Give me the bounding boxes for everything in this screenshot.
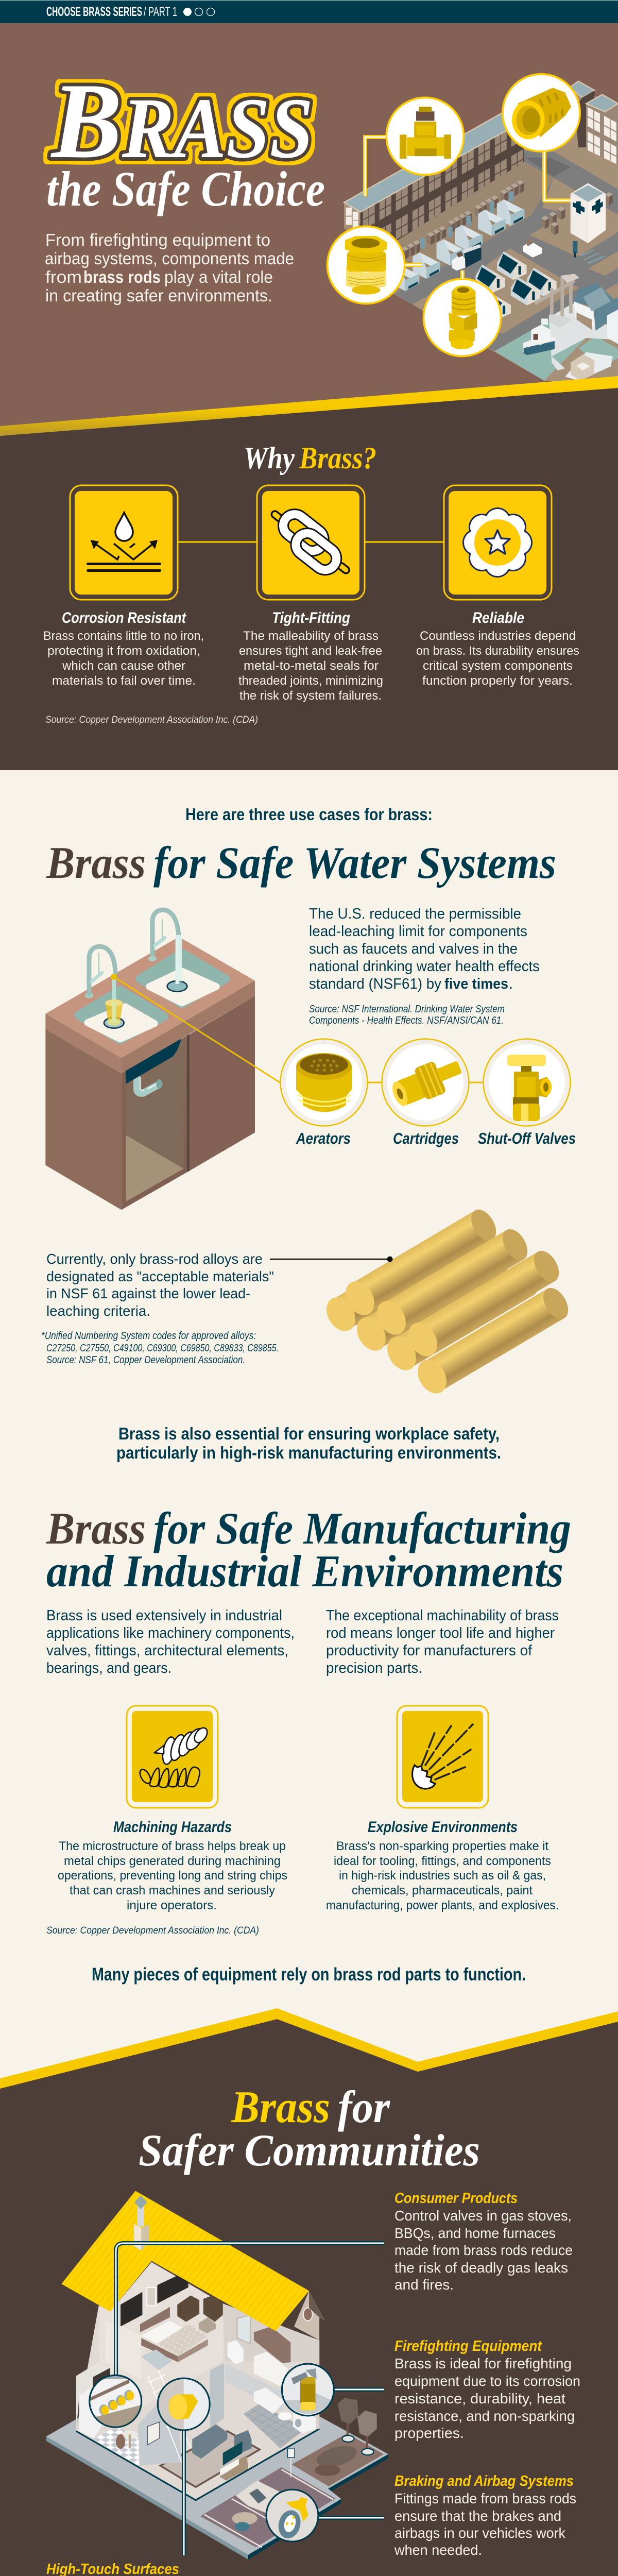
text: reliable: function properly for years.	[422, 674, 573, 688]
text: braking and airbag: Braking and Airbag Systems	[394, 2473, 574, 2489]
text: corrosion resistant: materials to fail over time.	[52, 674, 196, 688]
text: consumer products: BBQs, and home furnaces	[394, 2225, 556, 2241]
heading: manufacturing	[46, 1504, 571, 1597]
callout circle: gas stove knobs	[90, 2375, 142, 2430]
callout circle: cable gland	[328, 226, 405, 303]
hospital block	[541, 216, 549, 229]
paragraph: lead leaching: standard (NSF61) by	[309, 976, 441, 992]
text: consumer products: made from brass rods reduce	[394, 2242, 573, 2258]
component labels: Aerators	[296, 1129, 351, 1147]
text: explosive environments: Explosive Environments	[368, 1819, 518, 1836]
icon: water drop deflecting	[87, 513, 161, 572]
diagonal yellow band	[0, 376, 618, 436]
heading: safer communities: Brass	[231, 2082, 330, 2132]
paragraph: machinability: rod means longer tool life and higher	[326, 1625, 555, 1641]
parking sign	[290, 2458, 291, 2477]
subtitle: the Safe Choice	[46, 161, 325, 216]
paragraph: industrial applications	[46, 1607, 295, 1676]
source: NSF: Source: NSF International. Drinking Water System	[309, 1004, 505, 1015]
hero illustration: isometric industrial city	[344, 81, 618, 386]
text: tight-fitting: metal-to-metal seals for	[244, 659, 379, 673]
heading: why brass	[244, 441, 376, 475]
text: braking and airbag: Fittings made from brass rods	[394, 2490, 576, 2506]
bedroom	[140, 2307, 170, 2332]
paragraph: machinability: The exceptional machinability of brass	[326, 1607, 559, 1624]
cottages	[497, 251, 527, 280]
crane and warehouse	[535, 277, 575, 319]
faucets	[89, 910, 179, 994]
text: reliable: Reliable	[472, 609, 524, 626]
text: consumer products: and fires.	[394, 2277, 454, 2293]
title: Brass	[50, 61, 313, 181]
top series bar: / PART 1	[144, 5, 177, 19]
why brass panel	[0, 376, 618, 770]
text: machining hazards: Machining Hazards	[113, 1819, 232, 1836]
source: NSF	[309, 1004, 505, 1026]
long factory	[344, 203, 360, 230]
text: machining hazards	[58, 1819, 287, 1912]
paragraph: acceptable materials: Currently, only brass-rod alloys are	[46, 1251, 263, 1267]
callout circle: gate valve	[386, 97, 464, 175]
heading: manufacturing: and Industrial Environments	[46, 1547, 563, 1597]
transition statement: workplace safety: particularly in high-risk manufacturing environments.	[116, 1443, 501, 1462]
text: corrosion resistant: protecting it from oxidation,	[47, 644, 200, 658]
intro paragraph: From firefighting equipment to	[45, 230, 270, 249]
text: explosive environments: in high-risk industries such as oil & gas,	[339, 1869, 546, 1883]
heading: safer communities: Safer Communities	[139, 2126, 480, 2176]
text: braking and airbag	[394, 2473, 576, 2558]
paragraph: machinability	[326, 1607, 559, 1676]
paragraph: lead leaching	[309, 906, 540, 992]
paragraph: machinability: precision parts.	[326, 1660, 422, 1676]
back buildings	[570, 81, 595, 97]
paragraph: acceptable materials: in NSF 61 against the lower lead-	[46, 1285, 250, 1301]
text: consumer products: the risk of deadly gas leaks	[394, 2260, 568, 2276]
text: consumer products	[394, 2190, 573, 2293]
callout circle: door knob	[158, 2378, 210, 2430]
intro paragraph: play a vital role	[164, 267, 273, 286]
text: reliable: on brass. Its durability ensures	[416, 644, 579, 658]
component: cartridges	[382, 1039, 469, 1126]
factory units and stacks	[517, 180, 524, 193]
heading: safer communities	[139, 2082, 480, 2176]
connector lines	[178, 541, 443, 543]
callout circle: threaded insert	[503, 74, 580, 151]
callout circle: fire extinguisher	[282, 2364, 334, 2416]
text: machining hazards: metal chips generated during machining	[64, 1854, 281, 1868]
text: machining hazards: that can crash machines and seriously	[70, 1884, 275, 1897]
text: explosive environments: ideal for tooling, fittings, and components	[334, 1854, 551, 1868]
callout lines	[365, 137, 571, 279]
intro paragraph: in creating safer environments.	[45, 286, 272, 305]
intro paragraph: airbag systems, components made	[45, 249, 294, 268]
text: reliable	[416, 609, 579, 688]
footnote: alloys: C27250, C27550, C49100, C69300, C69850, C89833, C89855.	[46, 1343, 279, 1354]
text: machining hazards: injure operators.	[127, 1899, 217, 1912]
boats and crates	[523, 337, 555, 355]
heading: water systems: Brass	[46, 838, 146, 888]
footnote: alloys: Source: NSF 61, Copper Development Association.	[46, 1354, 245, 1366]
callout circle: threaded nipple	[423, 279, 501, 356]
heading: water systems: for Safe Water Systems	[153, 838, 556, 888]
illustration: brass rods	[321, 1205, 574, 1399]
text: explosive environments: Brass's non-sparking properties make it	[336, 1839, 548, 1853]
text: firefighting equipment: Firefighting Equipment	[394, 2338, 542, 2354]
component labels: Shut-Off Valves	[478, 1129, 576, 1147]
component labels	[296, 1129, 576, 1147]
text: firefighting equipment: resistance, and non-sparking	[394, 2408, 575, 2424]
text: firefighting equipment: equipment due to its corrosion	[394, 2373, 580, 2389]
text: firefighting equipment	[394, 2338, 580, 2441]
desk and shelves	[254, 2327, 290, 2363]
component: shut-off valves	[483, 1039, 571, 1126]
heading: manufacturing: Brass	[46, 1504, 146, 1554]
top series bar	[0, 0, 618, 23]
text: firefighting equipment: properties.	[394, 2425, 464, 2441]
illustration: double sink cabinet	[45, 910, 255, 1210]
component: aerators	[280, 1039, 368, 1126]
paragraph: lead leaching: five times	[444, 976, 508, 992]
text: corrosion resistant: Brass contains little to no iron,	[43, 629, 204, 643]
text: braking and airbag: when needed.	[394, 2542, 482, 2558]
callout circle: brake disc	[266, 2489, 318, 2541]
paragraph: acceptable materials	[46, 1251, 274, 1319]
text: reliable: critical system components	[423, 659, 573, 673]
text: tight-fitting: Tight-Fitting	[272, 609, 350, 626]
text: corrosion resistant: which can cause other	[62, 659, 185, 673]
paragraph: industrial applications: applications like machinery components,	[46, 1625, 295, 1641]
callout lines: house	[116, 2243, 384, 2555]
intro paragraph: from	[45, 267, 82, 286]
car and scooter	[235, 2481, 280, 2513]
text: consumer products: Control valves in gas stoves,	[394, 2208, 572, 2224]
paragraph: industrial applications: bearings, and gears.	[46, 1660, 171, 1676]
text: corrosion resistant	[43, 609, 204, 688]
transition statement: workplace safety	[116, 1424, 501, 1462]
icon: seal with star	[462, 507, 533, 578]
text: tight-fitting: The malleability of brass	[243, 629, 379, 643]
leader line to rods	[270, 1256, 392, 1262]
heading: manufacturing: for Safe Manufacturing	[153, 1504, 571, 1554]
title: Brass: B	[50, 61, 122, 181]
stairs and partition	[138, 2400, 181, 2466]
card: corrosion resistant	[70, 485, 178, 600]
heading: why brass: Brass?	[299, 441, 376, 475]
living room	[210, 2363, 224, 2428]
icon: sparks bursting	[413, 1724, 473, 1789]
text: reliable: Countless industries depend	[420, 629, 576, 643]
paragraph: industrial applications: Brass is used extensively in industrial	[46, 1607, 282, 1624]
transition statement: workplace safety: Brass is also essential for ensuring workplace safety,	[118, 1424, 500, 1443]
intro paragraph	[45, 230, 294, 305]
card: machining hazards	[127, 1706, 218, 1808]
heading: why brass: Why	[244, 441, 295, 475]
text: tight-fitting: threaded joints, minimizing	[238, 674, 383, 688]
paragraph: lead leaching: such as faucets and valves in the	[309, 941, 518, 957]
footnote: alloys	[41, 1330, 279, 1366]
communities panel background	[0, 2008, 618, 2576]
text: explosive environments: manufacturing, power plants, and explosives.	[326, 1899, 559, 1912]
card: reliable	[444, 485, 552, 600]
hero panel	[0, 23, 618, 435]
bathroom	[225, 2363, 283, 2412]
trees and bush	[338, 2398, 358, 2424]
illustration: cutaway house	[46, 2191, 388, 2560]
text: tight-fitting	[238, 609, 383, 703]
zigzag yellow band	[0, 2008, 618, 2089]
title: Brass: RASS	[122, 80, 313, 176]
source note: Source: Copper Development Association Inc. (CDA)	[46, 1925, 259, 1936]
text: braking and airbag: ensure that the brakes and	[394, 2508, 561, 2524]
top series bar: CHOOSE BRASS SERIES	[46, 5, 142, 19]
roof	[309, 2291, 325, 2321]
card: explosive environments	[397, 1706, 488, 1808]
icon: interlocked links	[263, 501, 357, 584]
text: corrosion resistant: Corrosion Resistant	[62, 609, 187, 626]
vehicles	[464, 247, 481, 267]
text: explosive environments: chemicals, pharmaceuticals, paint	[352, 1884, 533, 1897]
paragraph: machinability: productivity for manufacturers of	[326, 1642, 533, 1659]
text: machining hazards: The microstructure of brass helps break up	[59, 1839, 286, 1853]
footnote: alloys: *Unified Numbering System codes for approved alloys:	[41, 1330, 256, 1342]
source: NSF: Components - Health Effects. NSF/ANSI/CAN 61.	[309, 1015, 504, 1026]
paragraph: lead leaching: national drinking water health effects	[309, 958, 540, 975]
text: firefighting equipment: Brass is ideal for firefighting	[394, 2355, 572, 2371]
chimney	[134, 2224, 149, 2250]
paragraph: lead leaching: The U.S. reduced the permissible	[309, 906, 521, 922]
card: tight-fitting	[257, 485, 365, 600]
connector: faucet to components	[111, 974, 483, 1083]
use-cases intro: Here are three use cases for brass:	[185, 805, 433, 824]
paragraph: lead leaching: lead-leaching limit for components	[309, 923, 527, 940]
transition statement: equipment: Many pieces of equipment rely on brass rod parts to function.	[92, 1964, 526, 1985]
text: consumer products: Consumer Products	[394, 2190, 518, 2207]
text: tight-fitting: ensures tight and leak-free	[239, 644, 382, 658]
text: firefighting equipment: resistance, durability, heat	[394, 2391, 565, 2406]
paragraph: acceptable materials: designated as "acceptable materials"	[46, 1268, 274, 1284]
component labels: Cartridges	[393, 1129, 459, 1147]
icon: metal chips	[138, 1725, 210, 1788]
upper walls	[99, 2262, 223, 2409]
source note: Source: Copper Development Association Inc. (CDA)	[45, 715, 258, 725]
intro paragraph: brass rods	[83, 267, 161, 286]
text: explosive environments	[326, 1819, 559, 1912]
paragraph: acceptable materials: leaching criteria.	[46, 1303, 150, 1319]
text: braking and airbag: airbags in our vehicles work	[394, 2525, 566, 2541]
heading: safer communities: for	[338, 2082, 390, 2132]
kitchen and dining	[76, 2362, 112, 2431]
paragraph: industrial applications: valves, fittings, architectural elements,	[46, 1642, 288, 1659]
text: machining hazards: operations, preventing long and string chips	[58, 1869, 287, 1883]
paragraph: lead leaching: .	[509, 976, 513, 992]
text: tight-fitting: the risk of system failures.	[239, 689, 382, 703]
